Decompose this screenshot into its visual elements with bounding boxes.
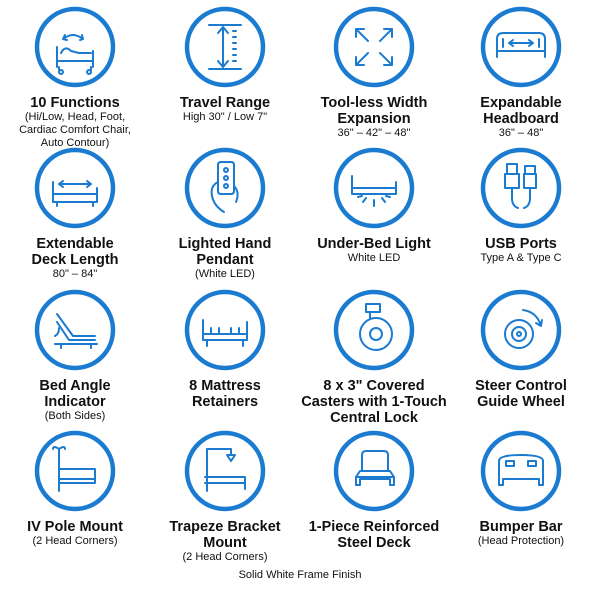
item: Lighted Hand Pendant: Lighted Hand xyxy=(179,236,271,252)
item: Expandable Headboard: Expandable xyxy=(480,95,562,111)
item: 8 Mattress Retainers: 8 Mattress xyxy=(189,378,261,394)
item: Casters: Casters with 1-Touch xyxy=(301,394,447,410)
item: Expandable Headboard: 36" – 48" xyxy=(499,127,543,139)
item: Tool-less Width Expansion: 36" – 42" – 48" xyxy=(338,127,410,139)
item: Steer Control Guide Wheel: Steer Control xyxy=(475,378,567,394)
icon: headboard xyxy=(480,6,562,88)
item: Steel Deck: Steel Deck xyxy=(337,535,411,551)
item: Casters: 8 x 3" Covered xyxy=(323,378,425,394)
item: Tool-less Width Expansion: Tool-less Width xyxy=(321,95,427,111)
icon: adjustable bed xyxy=(34,6,116,88)
item: Under-Bed Light: Under-Bed Light xyxy=(317,236,431,252)
icon: guide wheel xyxy=(480,290,562,370)
item: USB Ports: USB Ports xyxy=(485,236,557,252)
item: Steel Deck xyxy=(309,430,439,551)
icon: under-bed light xyxy=(334,148,414,228)
item: Travel Range: High 30" / Low 7" xyxy=(183,111,267,123)
item: Bed Angle Indicator xyxy=(34,290,116,422)
item: 10 Functions: (Hi/Low, Head, Foot, xyxy=(25,111,125,123)
item: 8 Mattress Retainers xyxy=(184,290,266,410)
item: Steer Control Guide Wheel: Guide Wheel xyxy=(477,394,565,410)
item: Bed Angle Indicator: Bed Angle xyxy=(39,378,111,394)
item: IV Pole Mount: (2 Head Corners) xyxy=(32,535,117,547)
item: Casters: Central Lock xyxy=(330,410,418,426)
item: Travel Range: Travel Range xyxy=(180,95,270,111)
item: Trapeze Bracket Mount: (2 Head Corners) xyxy=(182,551,267,563)
item: Bed Angle Indicator: (Both Sides) xyxy=(45,410,105,422)
item: 10 Functions: 10 Functions xyxy=(30,95,120,111)
item: 10 Functions: Cardiac Comfort Chair, xyxy=(19,124,131,136)
item: Tool-less Width Expansion xyxy=(320,6,427,139)
item: Under-Bed Light xyxy=(317,148,431,264)
item: Steer Control Guide Wheel xyxy=(475,290,567,410)
item: Expandable Headboard: Headboard xyxy=(483,111,559,127)
item: 10 Functions: Auto Contour) xyxy=(41,137,109,149)
item: Trapeze Bracket Mount xyxy=(169,430,281,563)
item: 8 Mattress Retainers: Retainers xyxy=(192,394,258,410)
item: Extendable Deck Length: 80" – 84" xyxy=(53,268,97,280)
item: Trapeze Bracket Mount: Mount xyxy=(203,535,247,551)
icon: height range xyxy=(184,6,266,88)
icon: expand arrows xyxy=(334,6,414,88)
item: Lighted Hand Pendant xyxy=(179,148,271,280)
item: Bumper Bar: (Head Protection) xyxy=(478,535,564,547)
icon: usb plugs xyxy=(480,148,562,228)
item: Lighted Hand Pendant: Pendant xyxy=(196,252,254,268)
icon: mattress retainers xyxy=(184,290,266,370)
item: Extendable Deck Length: Extendable xyxy=(36,236,114,252)
item: Extendable Deck Length: Deck Length xyxy=(31,252,118,268)
item: IV Pole Mount: IV Pole Mount xyxy=(27,519,123,535)
item: IV Pole Mount xyxy=(27,430,123,547)
item: Bumper Bar: Bumper Bar xyxy=(480,519,562,535)
icon: trapeze xyxy=(184,430,266,512)
item: USB Ports xyxy=(480,148,562,264)
footer note: Solid White Frame Finish xyxy=(239,569,361,581)
item: Steel Deck: 1-Piece Reinforced xyxy=(309,519,439,535)
icon: hand pendant xyxy=(184,148,266,228)
item: Travel Range xyxy=(180,6,270,123)
item: Lighted Hand Pendant: (White LED) xyxy=(195,268,255,280)
item: Expandable Headboard xyxy=(480,6,562,139)
item: Extendable Deck Length xyxy=(31,148,118,280)
icon: bed frame xyxy=(334,430,414,512)
item: Trapeze Bracket Mount: Trapeze Bracket xyxy=(169,519,281,535)
icon: bumper bar xyxy=(480,430,562,512)
icon: deck length xyxy=(34,148,116,228)
icon: caster xyxy=(334,290,414,370)
item: USB Ports: Type A & Type C xyxy=(480,252,562,264)
item: 10 Functions xyxy=(19,6,131,149)
icon: iv pole xyxy=(34,430,116,512)
item: Bumper Bar xyxy=(478,430,564,547)
icon: bed angle xyxy=(34,290,116,370)
item: Bed Angle Indicator: Indicator xyxy=(44,394,106,410)
item: Under-Bed Light: White LED xyxy=(348,252,400,264)
item: Tool-less Width Expansion: Expansion xyxy=(337,111,411,127)
item: Casters xyxy=(301,290,447,426)
